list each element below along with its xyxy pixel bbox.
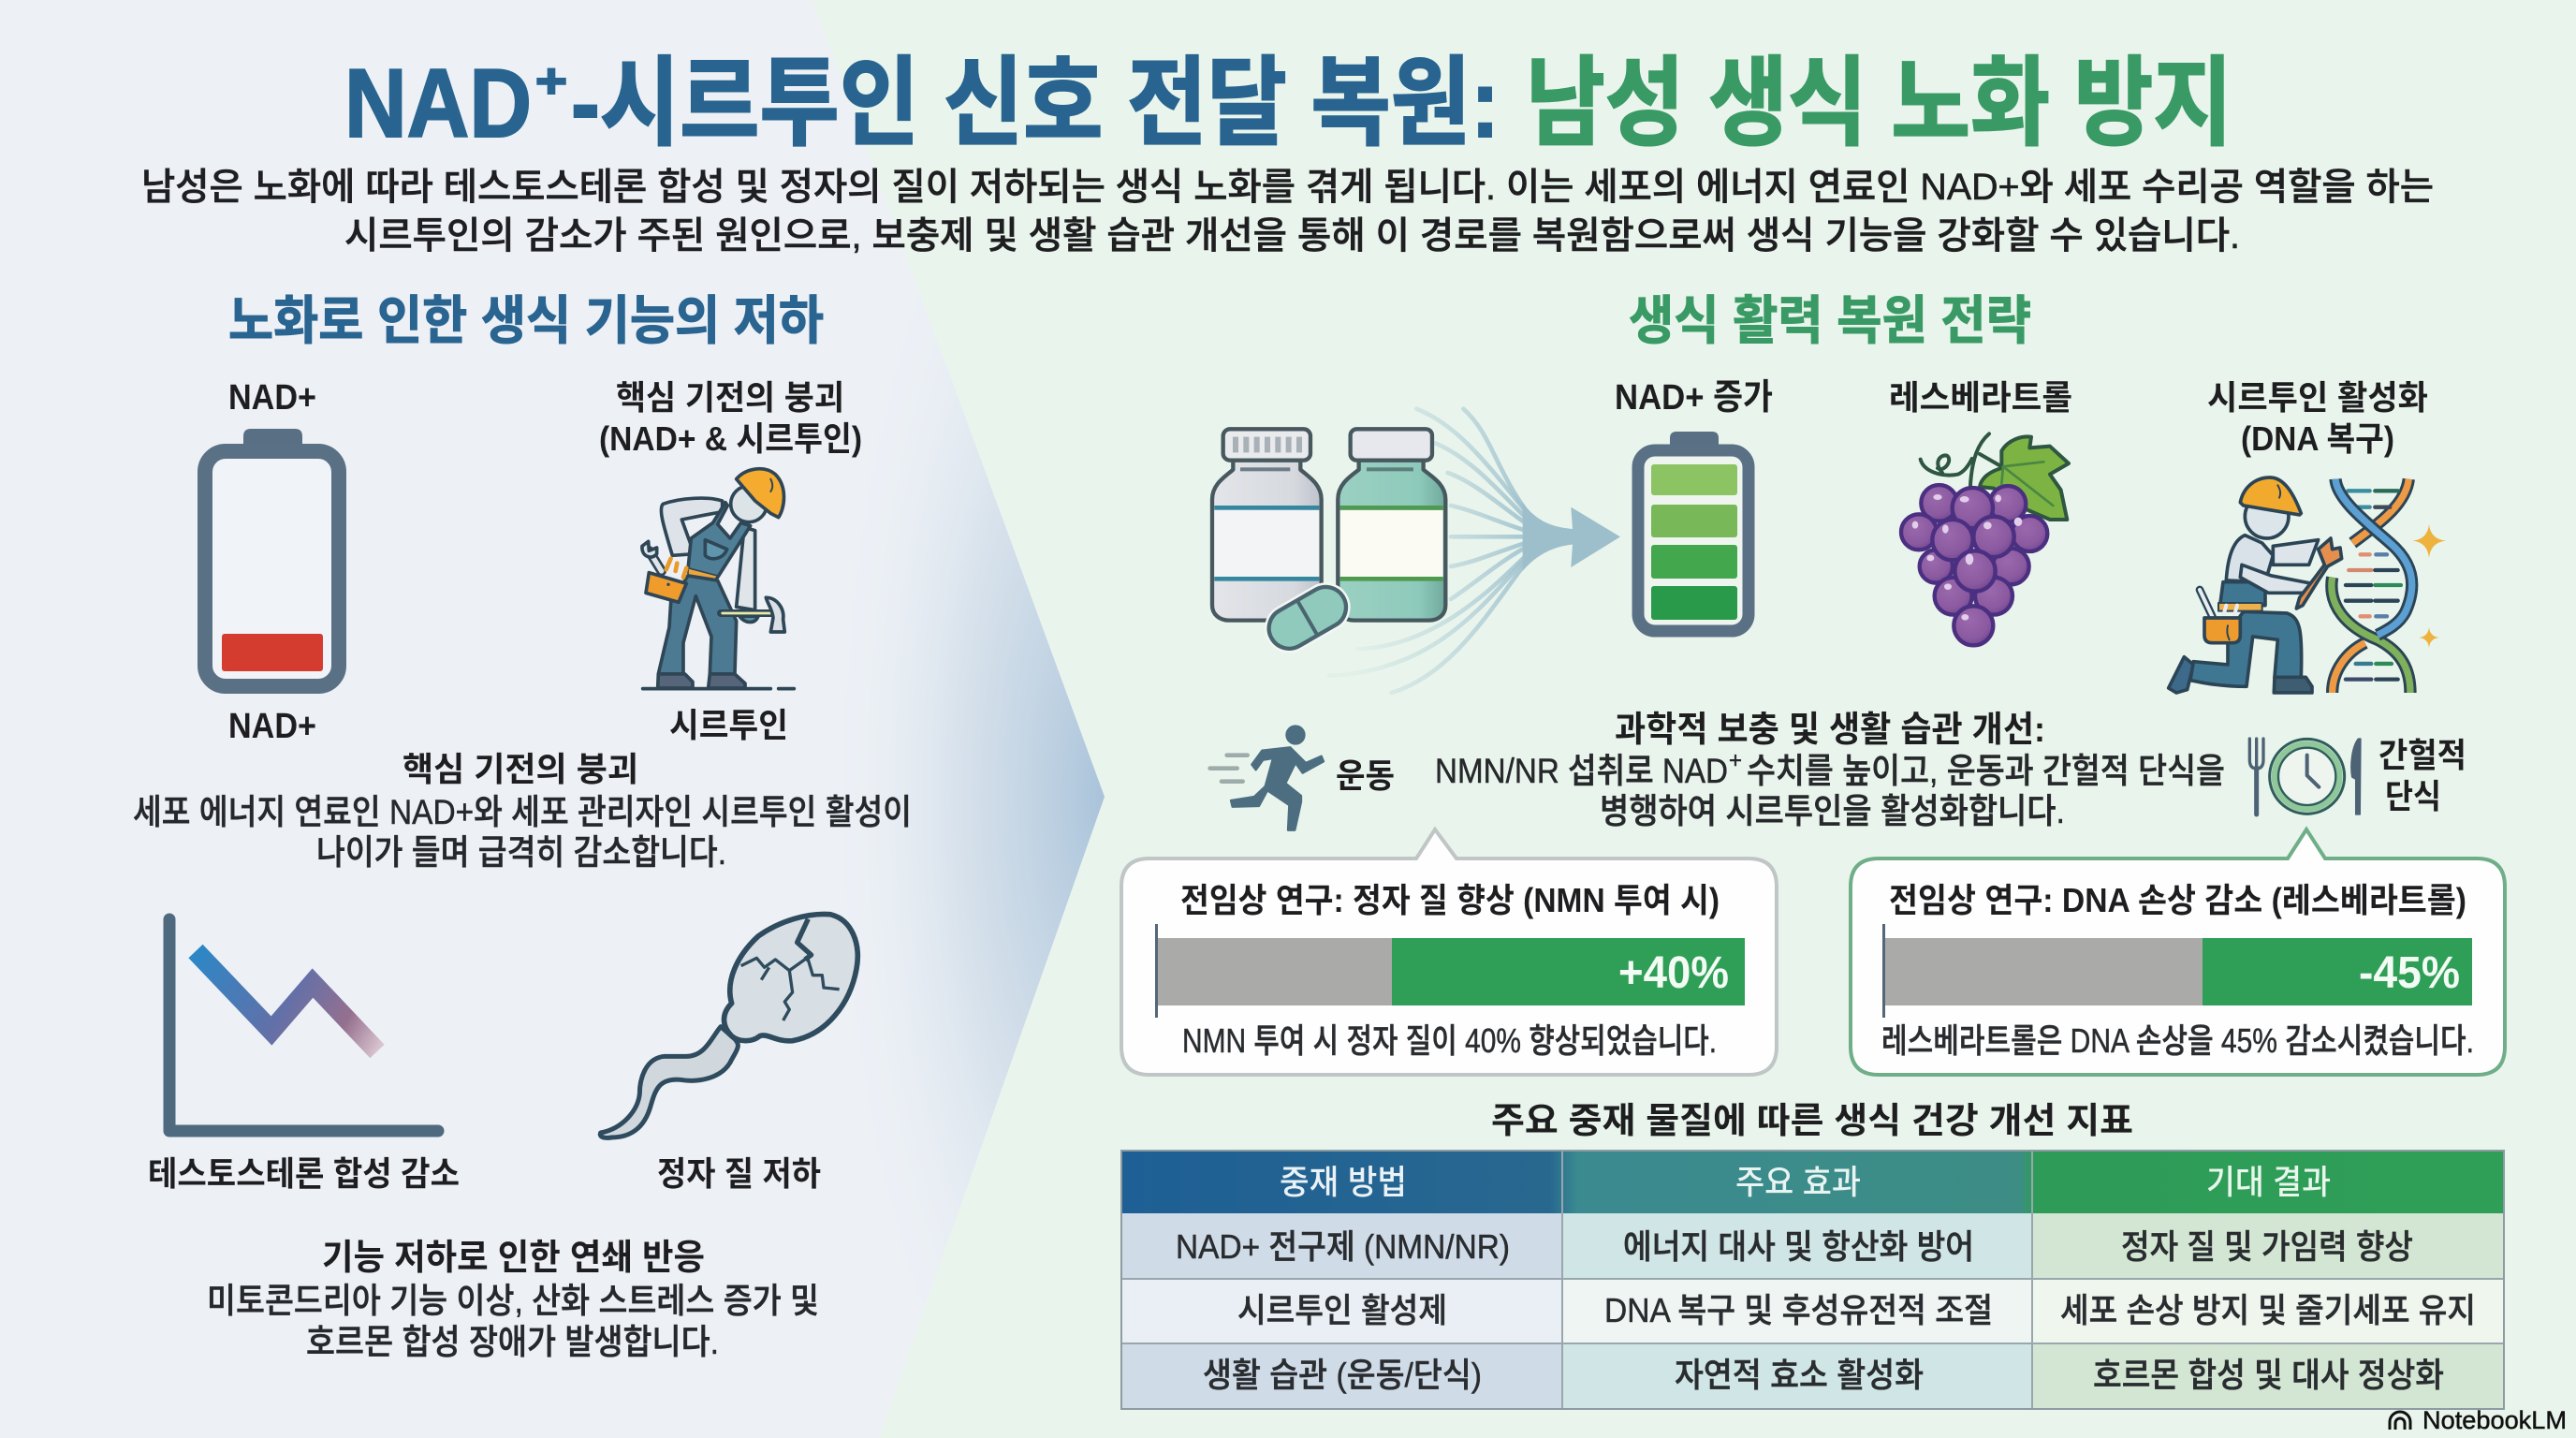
label: intermittent fasting: 간헐적 <box>2378 736 2466 774</box>
callout caption: 레스베라트롤은 DNA 손상을 45% 감소시켰습니다. <box>1881 1021 2474 1060</box>
text block: science supplement: NMN/NR 섭취로 NAD <box>1435 752 1728 790</box>
text block: core mechanism: 세포 에너지 연료인 NAD+와 세포 관리자인 시르투인 활성이 <box>133 793 912 831</box>
text block: cascade: 호르몬 합성 장애가 발생합니다. <box>306 1323 719 1361</box>
text block: science supplement <box>1435 711 2225 830</box>
text block: core mechanism <box>133 750 912 872</box>
background <box>0 0 1105 1438</box>
text block: core mechanism: 핵심 기전의 붕괴 <box>402 750 638 788</box>
title <box>344 50 2232 158</box>
table row 1 <box>1121 1213 2504 1279</box>
table row 3: 자연적 효소 활성화 <box>1675 1356 1924 1394</box>
label: NAD+ bottom: NAD+ <box>228 707 316 746</box>
text block: science supplement: 병행하여 시르투인을 활성화합니다. <box>1600 792 2065 830</box>
table header row: 중재 방법 <box>1280 1163 1407 1201</box>
title: -시르투인 신호 전달 복원: <box>571 50 1500 158</box>
panel: left decline <box>133 291 912 1361</box>
bar: -45%: -45% <box>2359 948 2460 998</box>
text block: science supplement: 과학적 보충 및 생활 습관 개선: <box>1615 711 2045 750</box>
table header row <box>1121 1151 2504 1213</box>
text block: cascade: 기능 저하로 인한 연쇄 반응 <box>322 1239 705 1278</box>
label: core mechanism collapse <box>599 378 862 458</box>
label: resveratrol: 레스베라트롤 <box>1889 378 2072 417</box>
table row 3: 생활 습관 (운동/단식) <box>1203 1356 1482 1394</box>
icon: grapes <box>1901 433 2069 645</box>
label: sirtuin: 시르투인 <box>669 706 788 744</box>
table row 1: NAD+ 전구제 (NMN/NR) <box>1176 1227 1510 1266</box>
table header row: 주요 효과 <box>1735 1163 1861 1201</box>
bar: +40%: +40% <box>1618 948 1729 998</box>
icon: full battery <box>1638 432 1749 631</box>
callout title: 전임상 연구: 정자 질 향상 (NMN 투여 시) <box>1180 881 1720 919</box>
label: sirtuin activation: 시르투인 활성화 <box>2207 378 2428 417</box>
icon: cracked sperm <box>600 914 857 1137</box>
table row 2: 세포 손상 방지 및 줄기세포 유지 <box>2060 1291 2476 1329</box>
table row 2 <box>1121 1279 2504 1343</box>
icon: runner <box>1210 725 1324 830</box>
right heading: 생식 활력 복원 전략 <box>1629 291 2031 350</box>
callout title: 전임상 연구: DNA 손상 감소 (레스베라트롤) <box>1889 881 2466 919</box>
title: 남성 생식 노화 방지 <box>1526 50 2232 158</box>
bar: +40% <box>1155 924 1745 1018</box>
callout: NMN sperm quality <box>1121 829 1777 1075</box>
text block: core mechanism: 나이가 들며 급격히 감소합니다. <box>316 833 726 872</box>
table row 3 <box>1121 1343 2504 1409</box>
label: testosterone decline: 테스토스테론 합성 감소 <box>148 1154 460 1193</box>
text block: cascade: 미토콘드리아 기능 이상, 산화 스트레스 증가 및 <box>207 1282 819 1320</box>
label: NAD+ top: NAD+ <box>228 378 316 418</box>
label: sperm quality decline: 정자 질 저하 <box>657 1154 821 1193</box>
NotebookLM watermark: NotebookLM <box>2422 1406 2567 1434</box>
icon: plate clock <box>2249 739 2361 814</box>
table: interventions <box>1121 1151 2504 1409</box>
left heading: 노화로 인한 생식 기능의 저하 <box>228 291 824 350</box>
intro text: 시르투인의 감소가 주된 원인으로, 보충제 및 생활 습관 개선을 통해 이 경로를 복원함으로써 생식 기능을 강화할 수 있습니다. <box>344 215 2240 257</box>
label: intermittent fasting <box>2378 736 2466 815</box>
text block: cascade <box>207 1239 819 1361</box>
bar: -45% <box>1882 924 2472 1018</box>
title: NAD <box>344 50 532 158</box>
table heading: 주요 중재 물질에 따른 생식 건강 개선 지표 <box>1491 1102 2133 1141</box>
table row 2: 시르투인 활성제 <box>1237 1291 1447 1329</box>
callout: resveratrol DNA damage <box>1851 829 2505 1075</box>
title: + <box>535 54 567 109</box>
label: intermittent fasting: 단식 <box>2385 777 2441 815</box>
callout caption: NMN 투여 시 정자 질이 40% 향상되었습니다. <box>1182 1021 1717 1060</box>
table row 1: 에너지 대사 및 항산화 방어 <box>1623 1227 1974 1266</box>
intro text: 남성은 노화에 따라 테스토스테론 합성 및 정자의 질이 저하되는 생식 노화를 겪게 됩니다. 이는 세포의 에너지 연료인 NAD+와 세포 수리공 역할을 하는 <box>141 167 2434 208</box>
icon: repair worker with DNA <box>2169 477 2446 693</box>
label: core mechanism collapse: (NAD+ & 시르투인) <box>599 419 862 458</box>
label: sirtuin activation <box>2207 378 2428 458</box>
text block: science supplement: 수치를 높이고, 운동과 간헐적 단식을 <box>1747 752 2225 790</box>
table row 3: 호르몬 합성 및 대사 정상화 <box>2093 1356 2444 1394</box>
intro text <box>141 167 2434 257</box>
label: exercise: 운동 <box>1336 756 1395 795</box>
icon: empty battery <box>205 429 339 686</box>
label: core mechanism collapse: 핵심 기전의 붕괴 <box>616 378 844 417</box>
label: sirtuin activation: (DNA 복구) <box>2241 419 2394 458</box>
panel: right restoration <box>1121 291 2505 1409</box>
text block: science supplement: + <box>1729 748 1742 773</box>
table header row: 기대 결과 <box>2206 1163 2331 1201</box>
label: NAD+ increase: NAD+ 증가 <box>1615 378 1773 418</box>
table row 2: DNA 복구 및 후성유전적 조절 <box>1604 1291 1993 1329</box>
table row 1: 정자 질 및 가임력 향상 <box>2121 1227 2413 1266</box>
icon: tired worker <box>642 469 794 689</box>
chart: testosterone decline <box>169 919 438 1131</box>
icon: bottles with streams and arrow <box>1212 409 1620 693</box>
